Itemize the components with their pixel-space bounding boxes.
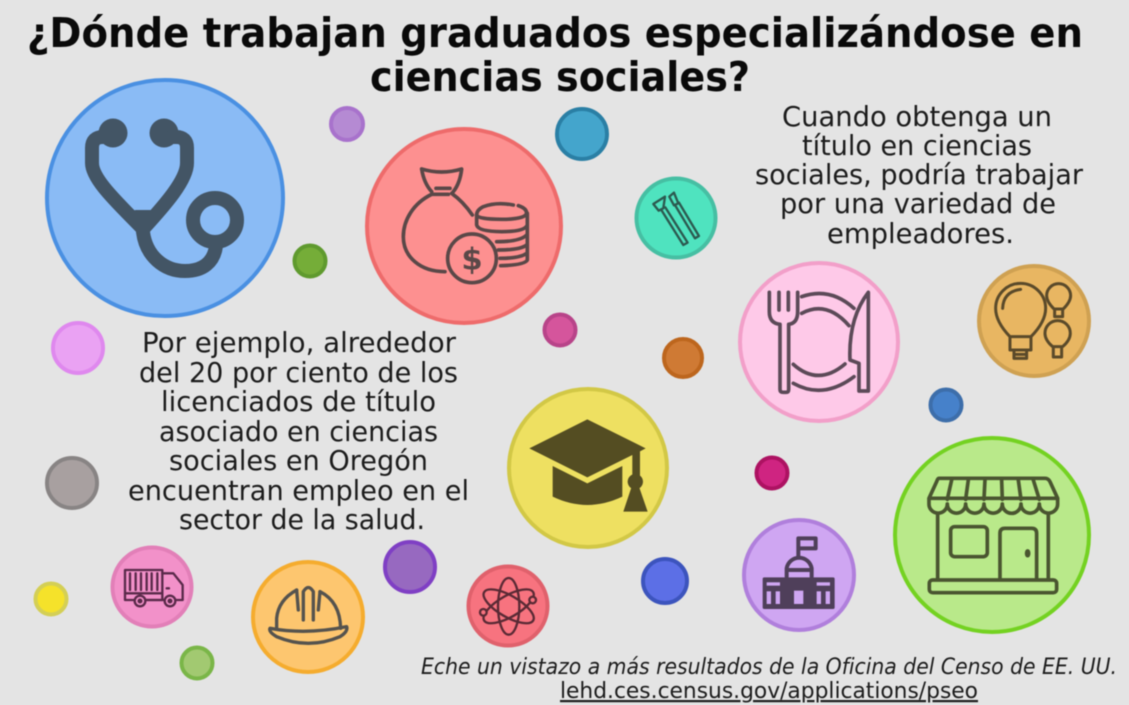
icon: graduation cap	[529, 419, 648, 512]
panel: construction bubble	[253, 562, 363, 672]
icon: atom	[479, 578, 539, 635]
text block: example	[128, 326, 469, 536]
panel: government bubble	[744, 520, 854, 630]
panel: retail bubble	[895, 438, 1089, 632]
icon: money bag and coins	[403, 169, 527, 283]
footer source	[421, 655, 1117, 704]
icon: plate and cutlery	[769, 292, 868, 392]
text block: example: sociales en Oregón	[169, 444, 428, 477]
text block: intro	[755, 100, 1083, 250]
panel: arts bubble	[636, 178, 716, 258]
decorative small bubbles	[36, 108, 962, 678]
text block: example: sector de la salud.	[179, 503, 425, 536]
text block: example: asociado en ciencias	[159, 415, 438, 448]
text block: intro: título en ciencias	[802, 129, 1032, 162]
panel: ideas bubble	[979, 266, 1089, 376]
panel: health bubble	[47, 80, 283, 316]
panel: science bubble	[468, 566, 548, 646]
icon: hard hat	[270, 587, 347, 643]
icon: light bulbs	[996, 283, 1071, 358]
text block: intro: empleadores.	[827, 217, 1014, 250]
icon: storefront	[929, 478, 1058, 593]
title	[27, 9, 1083, 101]
panel: transportation bubble	[112, 548, 192, 626]
text block: example: del 20 por ciento de los	[139, 356, 458, 389]
icon: money bag and coins: $	[461, 242, 483, 277]
text block: intro: por una variedad de	[780, 187, 1056, 220]
text block: example: encuentran empleo en el	[128, 474, 469, 507]
text block: intro: sociales, podría trabajar	[755, 158, 1083, 191]
icon: paint brushes	[653, 193, 699, 245]
icon: truck	[125, 570, 183, 606]
icon: stethoscope	[92, 118, 237, 271]
title: ¿Dónde trabajan graduados especializándose en	[27, 9, 1083, 57]
icon: capitol building	[763, 538, 835, 609]
footer source: lehd.ces.census.gov/applications/pseo	[560, 679, 978, 704]
text block: intro: Cuando obtenga un	[782, 100, 1052, 133]
title: ciencias sociales?	[370, 53, 750, 101]
text block: example: Por ejemplo, alrededor	[142, 326, 456, 359]
panel: food service bubble	[740, 263, 898, 421]
panel: education bubble	[509, 389, 667, 547]
panel: finance bubble	[367, 129, 561, 323]
text block: example: licenciados de título	[161, 385, 436, 418]
